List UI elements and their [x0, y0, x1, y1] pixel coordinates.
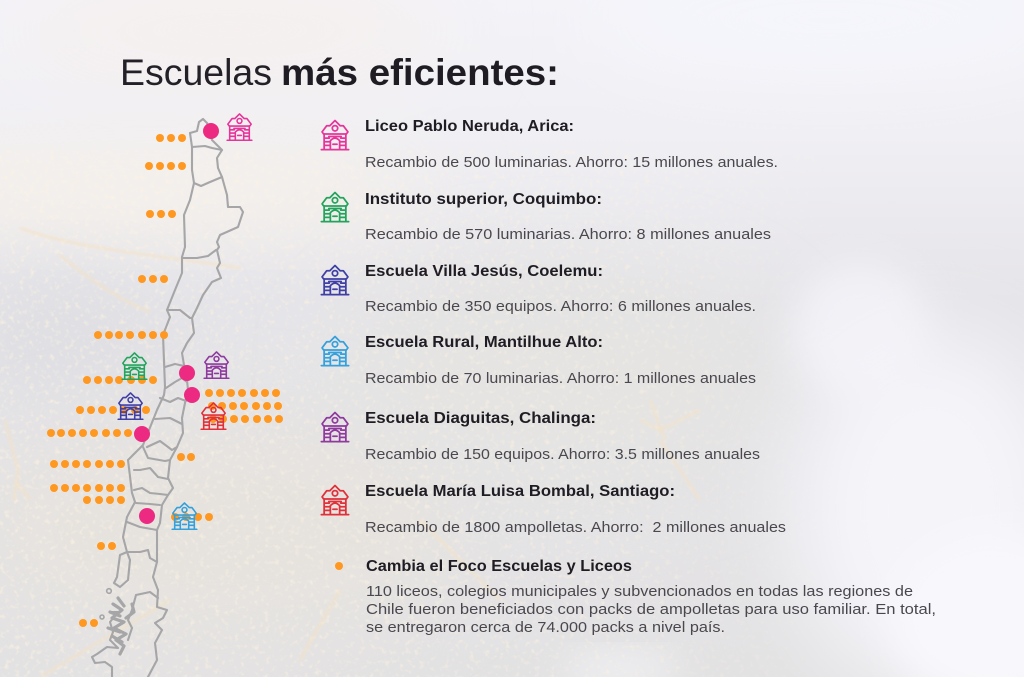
entry: Liceo Pablo Neruda [321, 118, 778, 171]
entry: Escuela Villa Jesús: Escuela Villa Jesús, Coelemu: [365, 263, 603, 280]
title [120, 52, 559, 93]
entry: Escuela María Luisa Bombal: Recambio de 1800 ampolletas. Ahorro: 2 millones anuales [365, 519, 786, 536]
entry: Escuela María Luisa Bombal: Escuela María Luisa Bombal, Santiago: [365, 483, 675, 500]
entry: Escuela Villa Jesús: Recambio de 350 equipos. Ahorro: 6 millones anuales. [365, 298, 756, 315]
entry: Escuela Diaguitas: Recambio de 150 equipos. Ahorro: 3.5 millones anuales [365, 446, 760, 463]
map icons: school houses [118, 114, 252, 529]
legend: Cambia el Foco: Cambia el Foco Escuelas y Liceos [366, 558, 632, 575]
legend: Cambia el Foco [335, 558, 936, 636]
entry: Instituto superior [321, 191, 771, 243]
entry: Instituto superior: Instituto superior, Coquimbo: [365, 191, 602, 208]
entry: Escuela Diaguitas [321, 410, 760, 463]
title: Escuelas [120, 52, 272, 93]
legend: Cambia el Foco: Chile fueron beneficiados con packs de ampolletas para uso familiar. En total, [366, 601, 936, 618]
orange dots: beneficiary schools by region [47, 134, 283, 627]
entry: Instituto superior: Recambio de 570 luminarias. Ahorro: 8 millones anuales [365, 226, 771, 243]
entry: Escuela María Luisa Bombal [321, 483, 786, 536]
entry: Escuela Rural: Recambio de 70 luminarias. Ahorro: 1 millones anuales [365, 370, 756, 387]
entry: Escuela Diaguitas: Escuela Diaguitas, Chalinga: [365, 410, 596, 427]
map of Chile with regions [92, 119, 243, 677]
title: más eficientes: [281, 52, 559, 93]
entry: Escuela Rural [321, 334, 756, 387]
legend: Cambia el Foco: se entregaron cerca de 74.000 packs a nivel país. [366, 619, 725, 636]
legend: Cambia el Foco: 110 liceos, colegios municipales y subvencionados en todas las regiones de [366, 583, 913, 600]
pink location markers [134, 123, 219, 524]
entry: Liceo Pablo Neruda: Recambio de 500 luminarias. Ahorro: 15 millones anuales. [365, 154, 778, 171]
entry: Escuela Villa Jesús [321, 263, 756, 315]
entry: Liceo Pablo Neruda: Liceo Pablo Neruda, Arica: [365, 118, 574, 135]
entry: Escuela Rural: Escuela Rural, Mantilhue Alto: [365, 334, 603, 351]
